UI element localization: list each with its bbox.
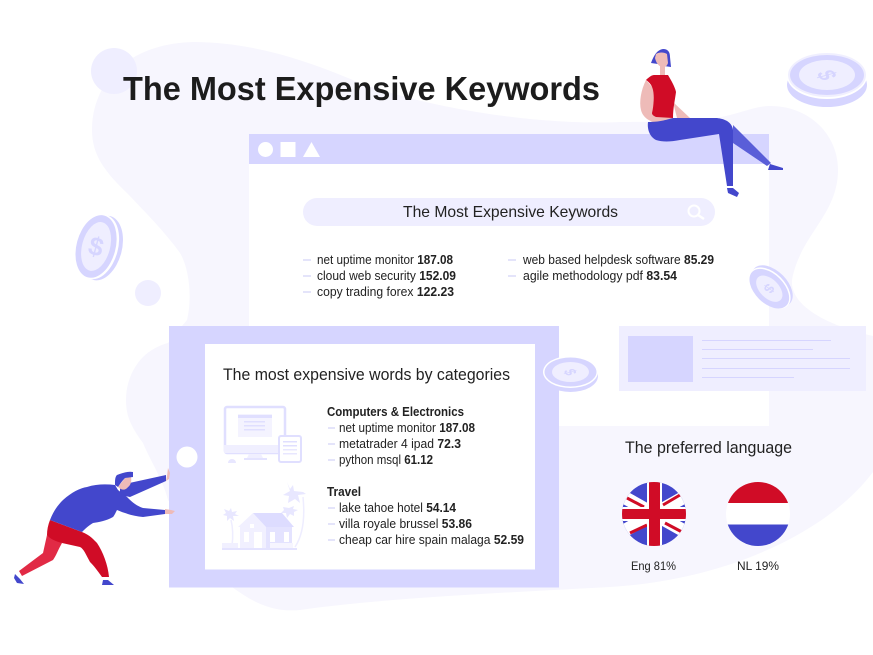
title: The Most Expensive Keywords [123,71,600,108]
icon: house and palm trees [222,482,306,550]
label: Eng 81%: Eng 81% [631,559,676,573]
background blob [92,42,873,610]
category: travel: villa royale brussel 53.86 [339,517,472,531]
upper hand [166,468,170,481]
front leg [47,520,109,577]
illustration: pushing man [14,468,175,585]
decorative circle top left [91,48,137,94]
coin on tablet [543,356,598,392]
search bar [303,198,715,226]
language heading: The preferred language [625,438,792,457]
coin top right [787,53,867,107]
category: computers and electronics: python msql 61.12 [339,453,433,467]
category: computers and electronics: net uptime monitor 187.08 [339,421,475,435]
near foot [727,188,739,197]
coin top right: $ [810,68,843,83]
torso and lower arm [50,484,165,532]
keyword list left column: copy trading forex 122.23 [317,285,454,299]
coin left [69,210,130,285]
decorative circle left [135,280,161,306]
neck [660,64,665,76]
far foot [768,164,783,170]
far leg [733,125,771,166]
back foot [14,574,24,584]
flag: UK [622,482,686,546]
lower hand [165,509,175,514]
category: travel: lake tahoe hotel 54.14 [339,501,456,515]
keyword list left column: net uptime monitor 187.08 [317,253,453,267]
category: travel: cheap car hire spain malaga 52.59 [339,533,524,547]
coin on tablet: $ [560,367,581,377]
category: computers and electronics: Computers & Electronics [327,405,464,419]
front foot [102,580,114,585]
trousers and near leg [648,118,733,186]
category: computers and electronics [327,405,475,467]
label: NL 19%: NL 19% [737,559,779,573]
keyword list right column: web based helpdesk software 85.29 [522,253,714,267]
ad card [619,326,866,391]
hair [115,472,133,487]
face [655,52,668,67]
flag: Netherlands [726,482,790,546]
face [118,477,131,490]
categories heading: The most expensive words by categories [223,365,510,384]
category: travel: Travel [327,485,361,499]
hair [651,49,671,67]
illustration: sitting woman [640,49,783,197]
coin right of window: $ [760,281,778,297]
shirt [646,75,676,118]
browser window [249,134,769,426]
near arm [640,80,677,124]
upper raised arm [120,475,166,497]
keyword list right column [508,253,714,283]
back leg [19,535,62,576]
far arm [673,102,690,122]
keyword list left column [303,253,456,299]
tablet panel [169,326,559,588]
coin left: $ [85,230,107,263]
keyword list left column: cloud web security 152.09 [317,269,456,283]
icon: computer and tablet [224,407,301,463]
search bar: The Most Expensive Keywords [403,204,618,221]
coin right of window [741,258,800,317]
keyword list right column: agile methodology pdf 83.54 [523,269,677,283]
category: travel [327,485,524,547]
category: computers and electronics: metatrader 4 ipad 72.3 [339,437,461,451]
